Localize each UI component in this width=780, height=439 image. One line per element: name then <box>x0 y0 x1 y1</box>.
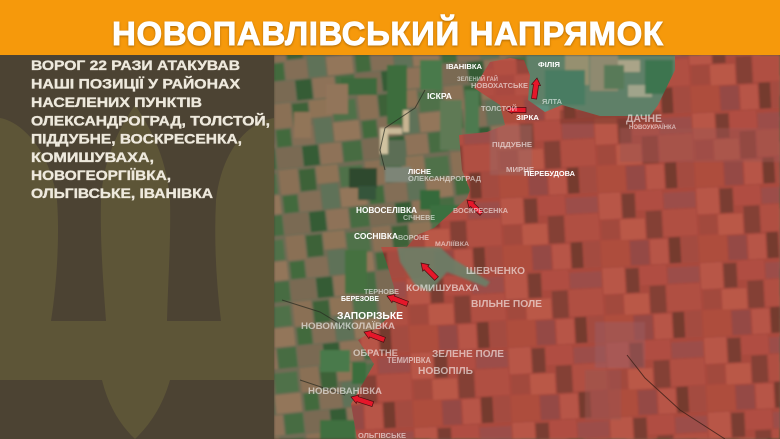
place labels: muted: МИРНЕ <box>506 165 534 174</box>
green farmland <box>274 55 780 439</box>
place labels: muted: ЗЕЛЕНЕ ПОЛЕ <box>432 349 504 360</box>
place labels: muted: НОВОМИКОЛАЇВКА <box>301 321 395 332</box>
summary text: ОЛЕКСАНДРОГРАД, ТОЛСТОЙ, <box>31 113 270 128</box>
Russian-occupied area overlay <box>340 55 780 439</box>
place labels: highlighted: ІВАНІВКА <box>446 62 483 71</box>
summary text: ВОРОГ 22 РАЗИ АТАКУВАВ <box>31 58 240 73</box>
place labels: muted: НОВОІВАНІВКА <box>308 386 382 397</box>
summary text: НАШІ ПОЗИЦІЇ У РАЙОНАХ <box>31 77 240 92</box>
arrow: Ternove <box>385 292 409 308</box>
header bar <box>0 0 780 55</box>
place labels: muted: НОВОУКРАЇНКА <box>629 124 677 131</box>
place labels: highlighted: СОСНІВКА <box>354 232 398 241</box>
satellite map <box>274 55 780 439</box>
place labels: muted: ЯЛТА <box>542 99 562 106</box>
place labels: muted: ТЕРНОВЕ <box>364 289 399 296</box>
place labels: muted: НОВОПІЛЬ <box>418 366 473 377</box>
place labels: highlighted: ЛІСНЕ <box>408 167 431 176</box>
place labels: muted: ДАЧНЕ <box>626 113 662 125</box>
arrow: Novoivanivka <box>350 393 374 408</box>
place labels: muted: ВОРОНЕ <box>398 235 429 242</box>
place labels: muted: ЗЕЛЕНИЙ ГАЙ <box>457 75 498 83</box>
place labels: highlighted: ІСКРА <box>427 92 452 101</box>
place labels: muted: МАЛІЇВКА <box>435 240 469 248</box>
place labels: muted: ОЛЕКСАНДРОГРАД <box>408 174 482 183</box>
summary text: НАСЕЛЕНИХ ПУНКТІВ <box>31 95 202 110</box>
place labels: muted: ВІЛЬНЕ ПОЛЕ <box>471 299 542 310</box>
place labels: muted: ТОЛСТОЙ <box>481 104 517 113</box>
place labels: highlighted <box>337 62 575 322</box>
trident emblem <box>0 105 274 439</box>
place labels: muted: ОБРАТНЕ <box>353 348 398 359</box>
left panel background <box>0 55 274 439</box>
summary text <box>31 58 270 201</box>
place labels: highlighted: ФІЛІЯ <box>538 62 560 69</box>
summary text: ОЛЬГІВСЬКЕ, ІВАНІВКА <box>31 186 213 201</box>
place labels: muted <box>301 75 677 439</box>
summary text: ПІДДУБНЕ, ВОСКРЕСЕНКА, <box>31 132 242 147</box>
place labels: muted: ШЕВЧЕНКО <box>466 266 525 277</box>
place labels: highlighted: ПЕРЕБУДОВА <box>524 171 575 178</box>
place labels: highlighted: БЕРЕЗОВЕ <box>341 296 379 303</box>
place labels: muted: ПІДДУБНЕ <box>492 140 532 149</box>
summary text: КОМИШУВАХА, <box>31 150 154 165</box>
arrow: Voskresenka <box>464 197 485 217</box>
place labels: muted: ТЕМИРІВКА <box>387 355 431 365</box>
arrow: Tolstoi <box>506 106 526 114</box>
place labels: highlighted: ЗІРКА <box>516 115 539 122</box>
place labels: muted: НОВОХАТСЬКЕ <box>471 81 528 90</box>
muted corridor around Komyshuvakha <box>397 247 490 292</box>
rivers <box>282 90 425 395</box>
place labels: muted: ВОСКРЕСЕНКА <box>453 208 508 215</box>
attack arrows <box>350 77 541 408</box>
place labels: muted: КОМИШУВАХА <box>406 283 479 294</box>
arrow: Novomykolaivka <box>362 328 386 344</box>
place labels: highlighted: НОВОСЕЛІВКА <box>356 206 417 215</box>
place labels: highlighted: ЗАПОРІЗЬКЕ <box>337 310 403 322</box>
summary text: НОВОГЕОРГІЇВКА, <box>31 168 171 183</box>
arrow: Komyshuvakha <box>418 260 440 282</box>
place labels: muted: СІЧНЕВЕ <box>403 215 435 222</box>
title: НОВОПАВЛІВСЬКИЙ НАПРЯМОК <box>112 14 664 52</box>
arrow: Filiia <box>530 77 541 99</box>
